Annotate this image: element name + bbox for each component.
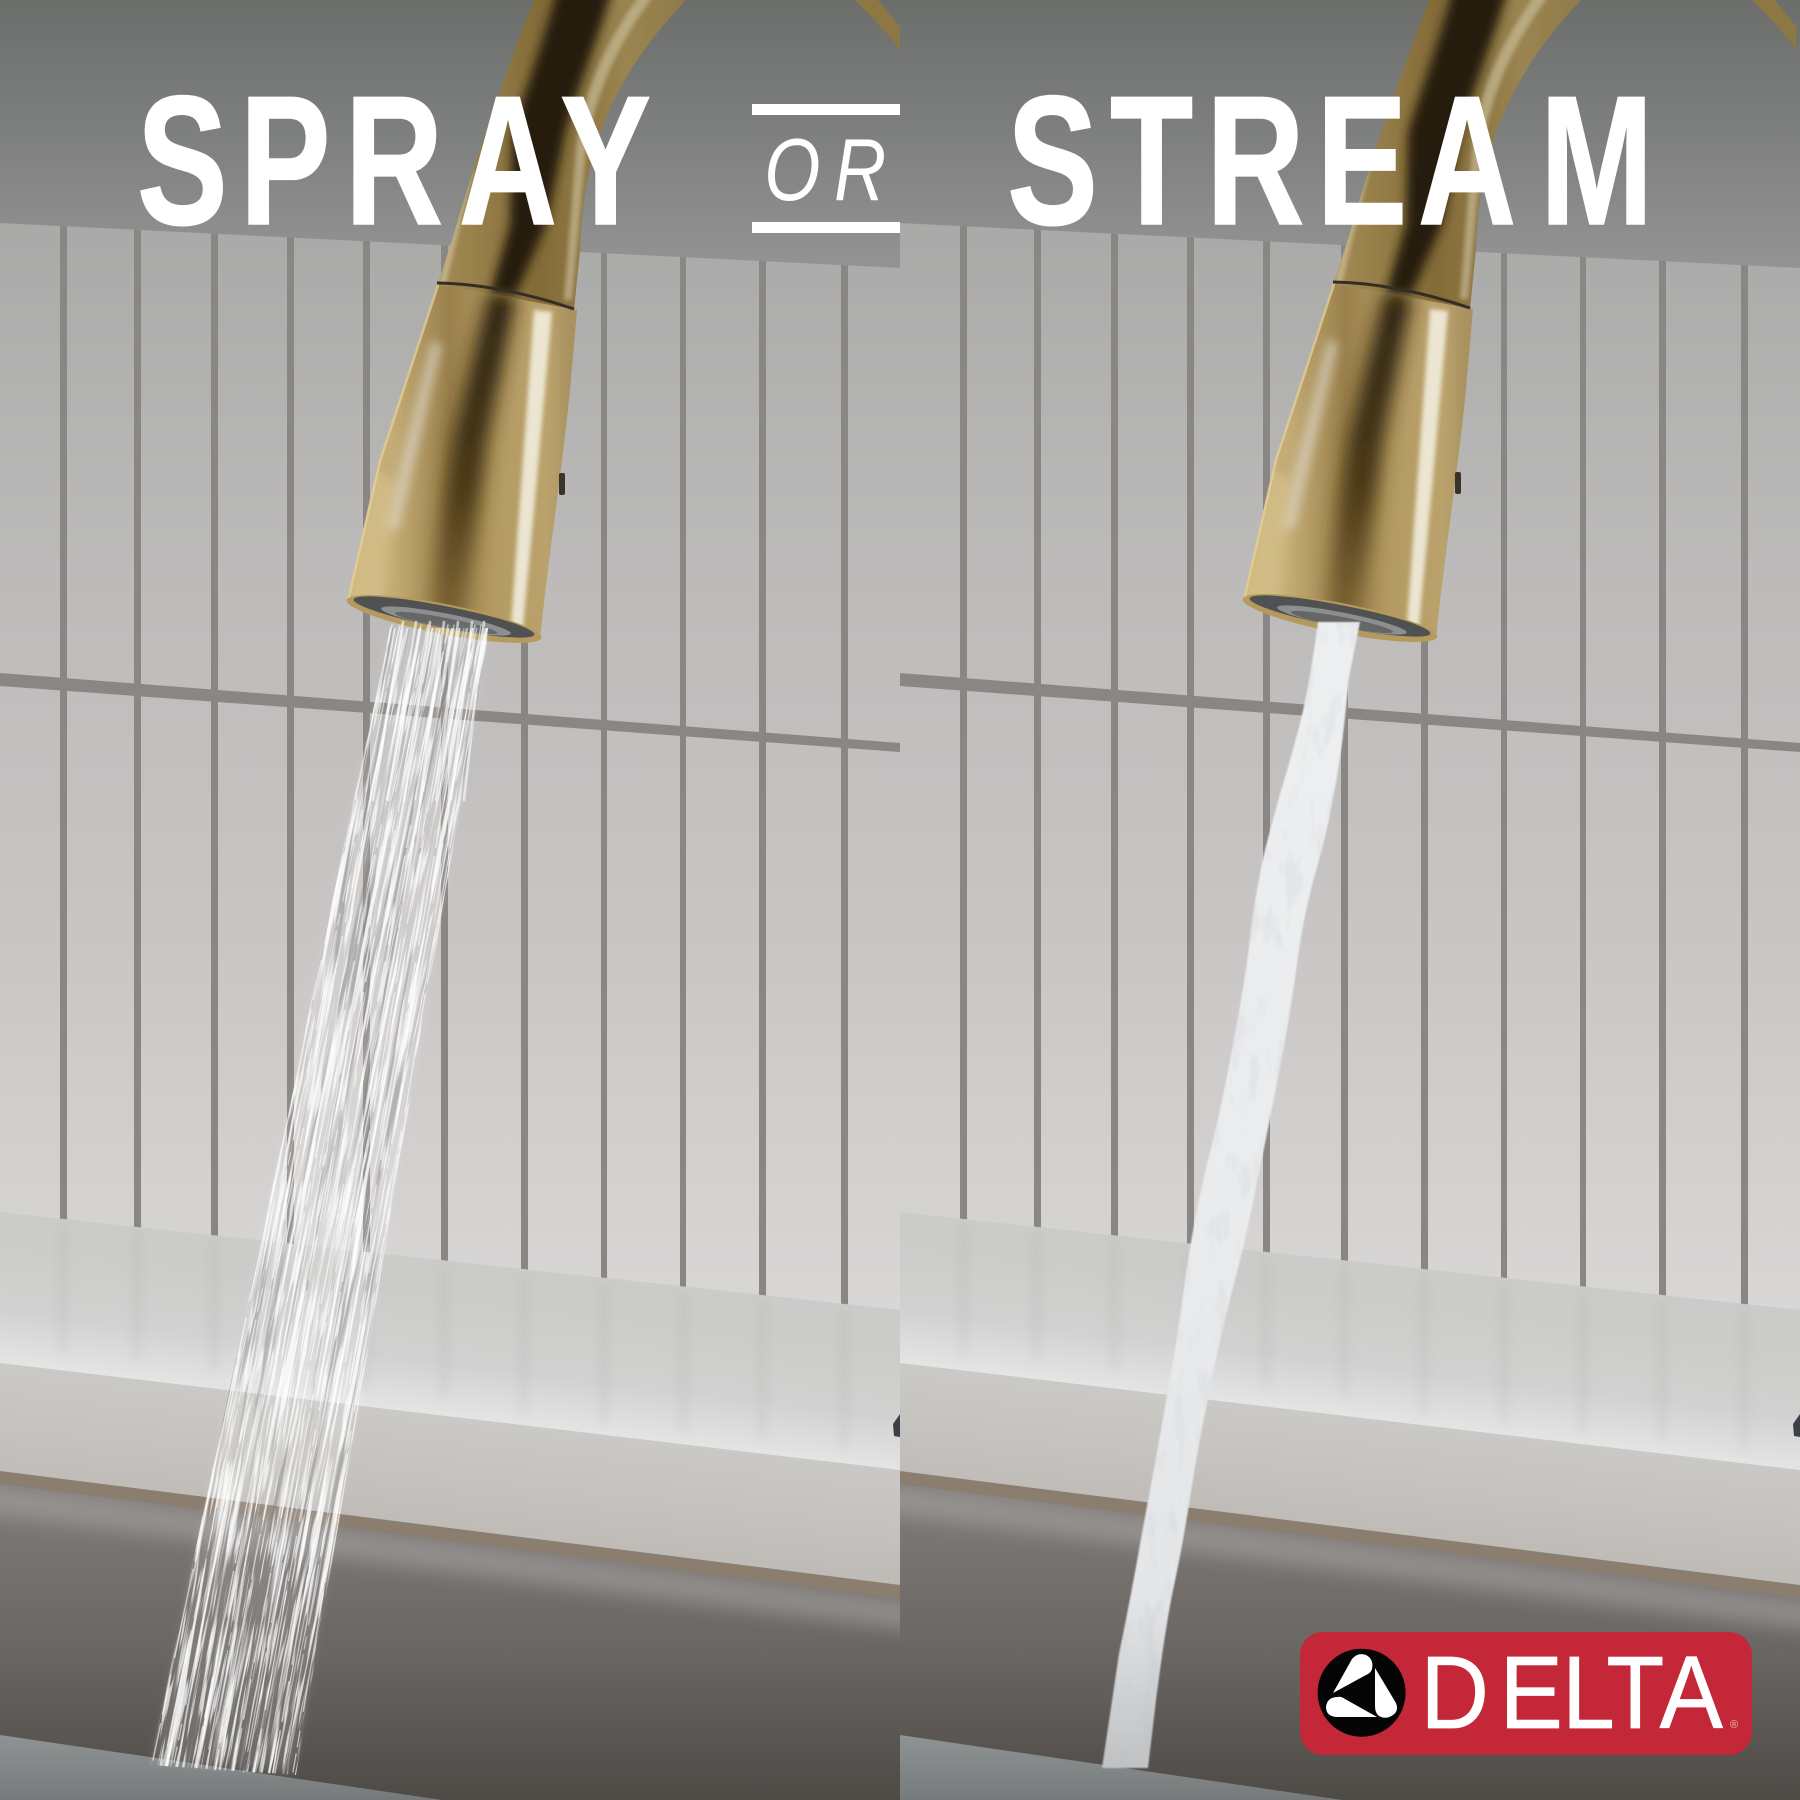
kitchen background: stream <box>850 0 1800 1800</box>
divider word: OR <box>752 104 900 233</box>
wordmark: DELTA <box>1420 1634 1723 1750</box>
registered mark: ® <box>1730 1719 1738 1731</box>
title: STREAM: STREAM <box>1007 58 1653 264</box>
panel: stream <box>850 0 1800 1800</box>
title: SPRAY: SPRAY <box>137 58 651 264</box>
icon: Delta trigon <box>1318 1649 1406 1737</box>
divider word: OR: OR <box>764 121 886 220</box>
faucet: stream <box>1240 0 1796 652</box>
kitchen background: spray <box>0 0 950 1800</box>
faucet: spray <box>344 0 900 653</box>
logo: Delta <box>1300 1632 1752 1755</box>
water spray <box>150 620 490 1775</box>
panel: spray <box>0 0 950 1800</box>
water stream <box>1102 621 1361 1769</box>
